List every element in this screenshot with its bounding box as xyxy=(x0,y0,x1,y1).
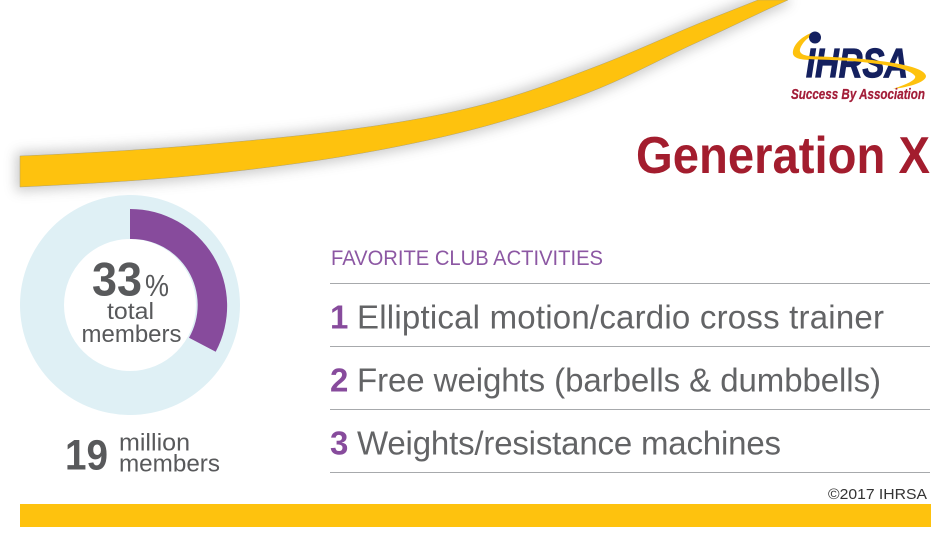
logo swoosh front xyxy=(806,56,926,89)
donut chart: members xyxy=(82,321,182,348)
donut chart: % xyxy=(145,268,169,303)
members count xyxy=(65,430,220,480)
logo dot xyxy=(809,32,821,44)
logo swoosh back xyxy=(793,33,813,60)
activities heading: FAVORITE CLUB ACTIVITIES xyxy=(331,247,603,270)
donut chart xyxy=(20,195,240,415)
donut track xyxy=(20,195,240,415)
copyright: ©2017 IHRSA xyxy=(828,486,927,503)
activity 1: Elliptical motion/cardio cross trainer xyxy=(357,298,884,336)
activity 1: 1 xyxy=(330,298,348,336)
bottom yellow bar xyxy=(20,504,931,527)
activity 3: Weights/resistance machines xyxy=(357,424,781,462)
activity 3: 3 xyxy=(330,424,348,462)
donut percent: 33 xyxy=(92,252,142,306)
members count: million xyxy=(119,430,190,456)
activity 2: Free weights (barbells & dumbbells) xyxy=(357,362,881,398)
donut purple segment xyxy=(130,209,227,352)
logo wordmark: IHRSA xyxy=(806,40,908,86)
donut label: total xyxy=(107,298,154,324)
members count: members xyxy=(119,450,220,478)
activity 2: 2 xyxy=(330,362,348,398)
members count: 19 xyxy=(65,432,108,480)
logo: IHRSA xyxy=(791,32,926,103)
yellow swoosh xyxy=(20,0,788,187)
activities list xyxy=(330,284,930,472)
